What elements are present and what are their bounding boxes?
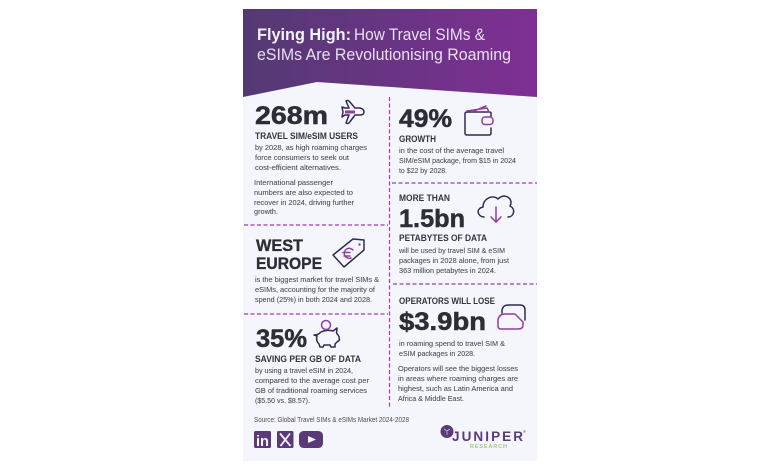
panel: 268m users: cost-efficient alternatives. [255,163,341,172]
header banner [243,9,537,97]
panel: 49% growth: to $22 by 2028. [399,166,447,175]
panel: 35% saving: compared to the average cost per [255,376,370,385]
panel: 1.5bn petabytes [398,193,514,275]
panel: 1.5bn petabytes: 1.5bn [399,205,465,233]
panel: 268m users [254,100,367,216]
panel: 49% growth: GROWTH [399,134,436,145]
panel: 268m users: by 2028, as high roaming charges [255,143,367,152]
panel: 49% growth: in the cost of the average travel [399,146,504,155]
panel: 1.5bn petabytes: packages in 2028 alone, from just [399,256,509,265]
icon: YouTube [299,431,323,448]
logo: Juniper Research [440,425,526,450]
panel: 49% growth: SIM/eSIM package, from $15 in 2024 [399,156,516,165]
panel: operators will lose: Operators will see the biggest losses [398,364,518,373]
panel: 268m users: 268m [255,102,328,130]
background panel [243,9,537,461]
panel: West Europe: eSIMs, accounting for the majority of [255,285,376,294]
panel: 1.5bn petabytes: MORE THAN [399,193,450,204]
panel: 49% growth [399,105,516,175]
panel: 268m users: growth. [254,207,278,216]
panel: 49% growth: 49% [399,105,452,133]
title: Flying High: [257,26,351,44]
panel: 1.5bn petabytes: will be used by travel SIM & eSIM [398,246,505,255]
panel: 35% saving [255,320,370,405]
icon: euro price tag [333,239,364,267]
icon: SIM cards [498,305,525,329]
title [257,26,511,64]
panel: West Europe [255,236,379,304]
icon: X [277,431,294,448]
logo: Juniper Research: RESEARCH [470,444,507,450]
panel: 35% saving: 35% [256,325,307,353]
source: Source: Global Travel SIMs & eSIMs Market 2024-2028 [254,415,409,424]
panel: 1.5bn petabytes: 363 million petabytes in 2024. [399,266,496,275]
panel: 268m users: numbers are also expected to [254,188,353,197]
panel: West Europe: EUROPE [256,254,322,273]
panel: operators will lose: in areas where roaming charges are [398,374,518,383]
panel: 35% saving: SAVING PER GB OF DATA [255,354,361,365]
icon: piggy bank [314,320,340,347]
panel: 35% saving: by using a travel eSIM in 2024, [255,366,353,375]
panel: operators will lose [398,296,525,403]
panel: operators will lose: $3.9bn [399,308,486,336]
panel: 268m users: International passenger [254,178,334,187]
panel: operators will lose: OPERATORS WILL LOSE [399,296,495,307]
panel: West Europe: spend (25%) in both 2024 and 2028. [255,295,372,304]
panel: operators will lose: Africa & Middle East. [398,394,464,403]
panel: operators will lose: eSIM packages in 2028. [399,349,475,358]
panel: 268m users: recover in 2024, driving further [254,198,355,207]
title: How Travel SIMs & [354,26,485,44]
icon: cloud download [478,196,514,222]
social icons [254,431,323,450]
panel: 1.5bn petabytes: PETABYTES OF DATA [399,233,487,244]
logo: Juniper Research: JUNIPER [452,429,523,444]
panel: operators will lose: highest, such as Latin America and [398,384,513,393]
panel: 35% saving: ($5.50 vs. $8.57). [255,396,310,405]
logo: Juniper Research: ® [523,429,526,434]
title: eSIMs Are Revolutionising Roaming [257,46,511,64]
icon: wallet [465,106,493,135]
panel: West Europe: is the biggest market for travel SIMs & [255,275,379,284]
panel: 35% saving: GB of traditional roaming services [255,386,367,395]
panel: West Europe: WEST [256,236,304,255]
panel: operators will lose: in roaming spend to travel SIM & [399,339,505,348]
icon: plane [342,100,364,124]
icon: LinkedIn: in [256,433,269,450]
panel: 268m users: TRAVEL SIM/eSIM USERS [255,131,358,142]
panel: 268m users: force consumers to seek out [255,153,349,162]
